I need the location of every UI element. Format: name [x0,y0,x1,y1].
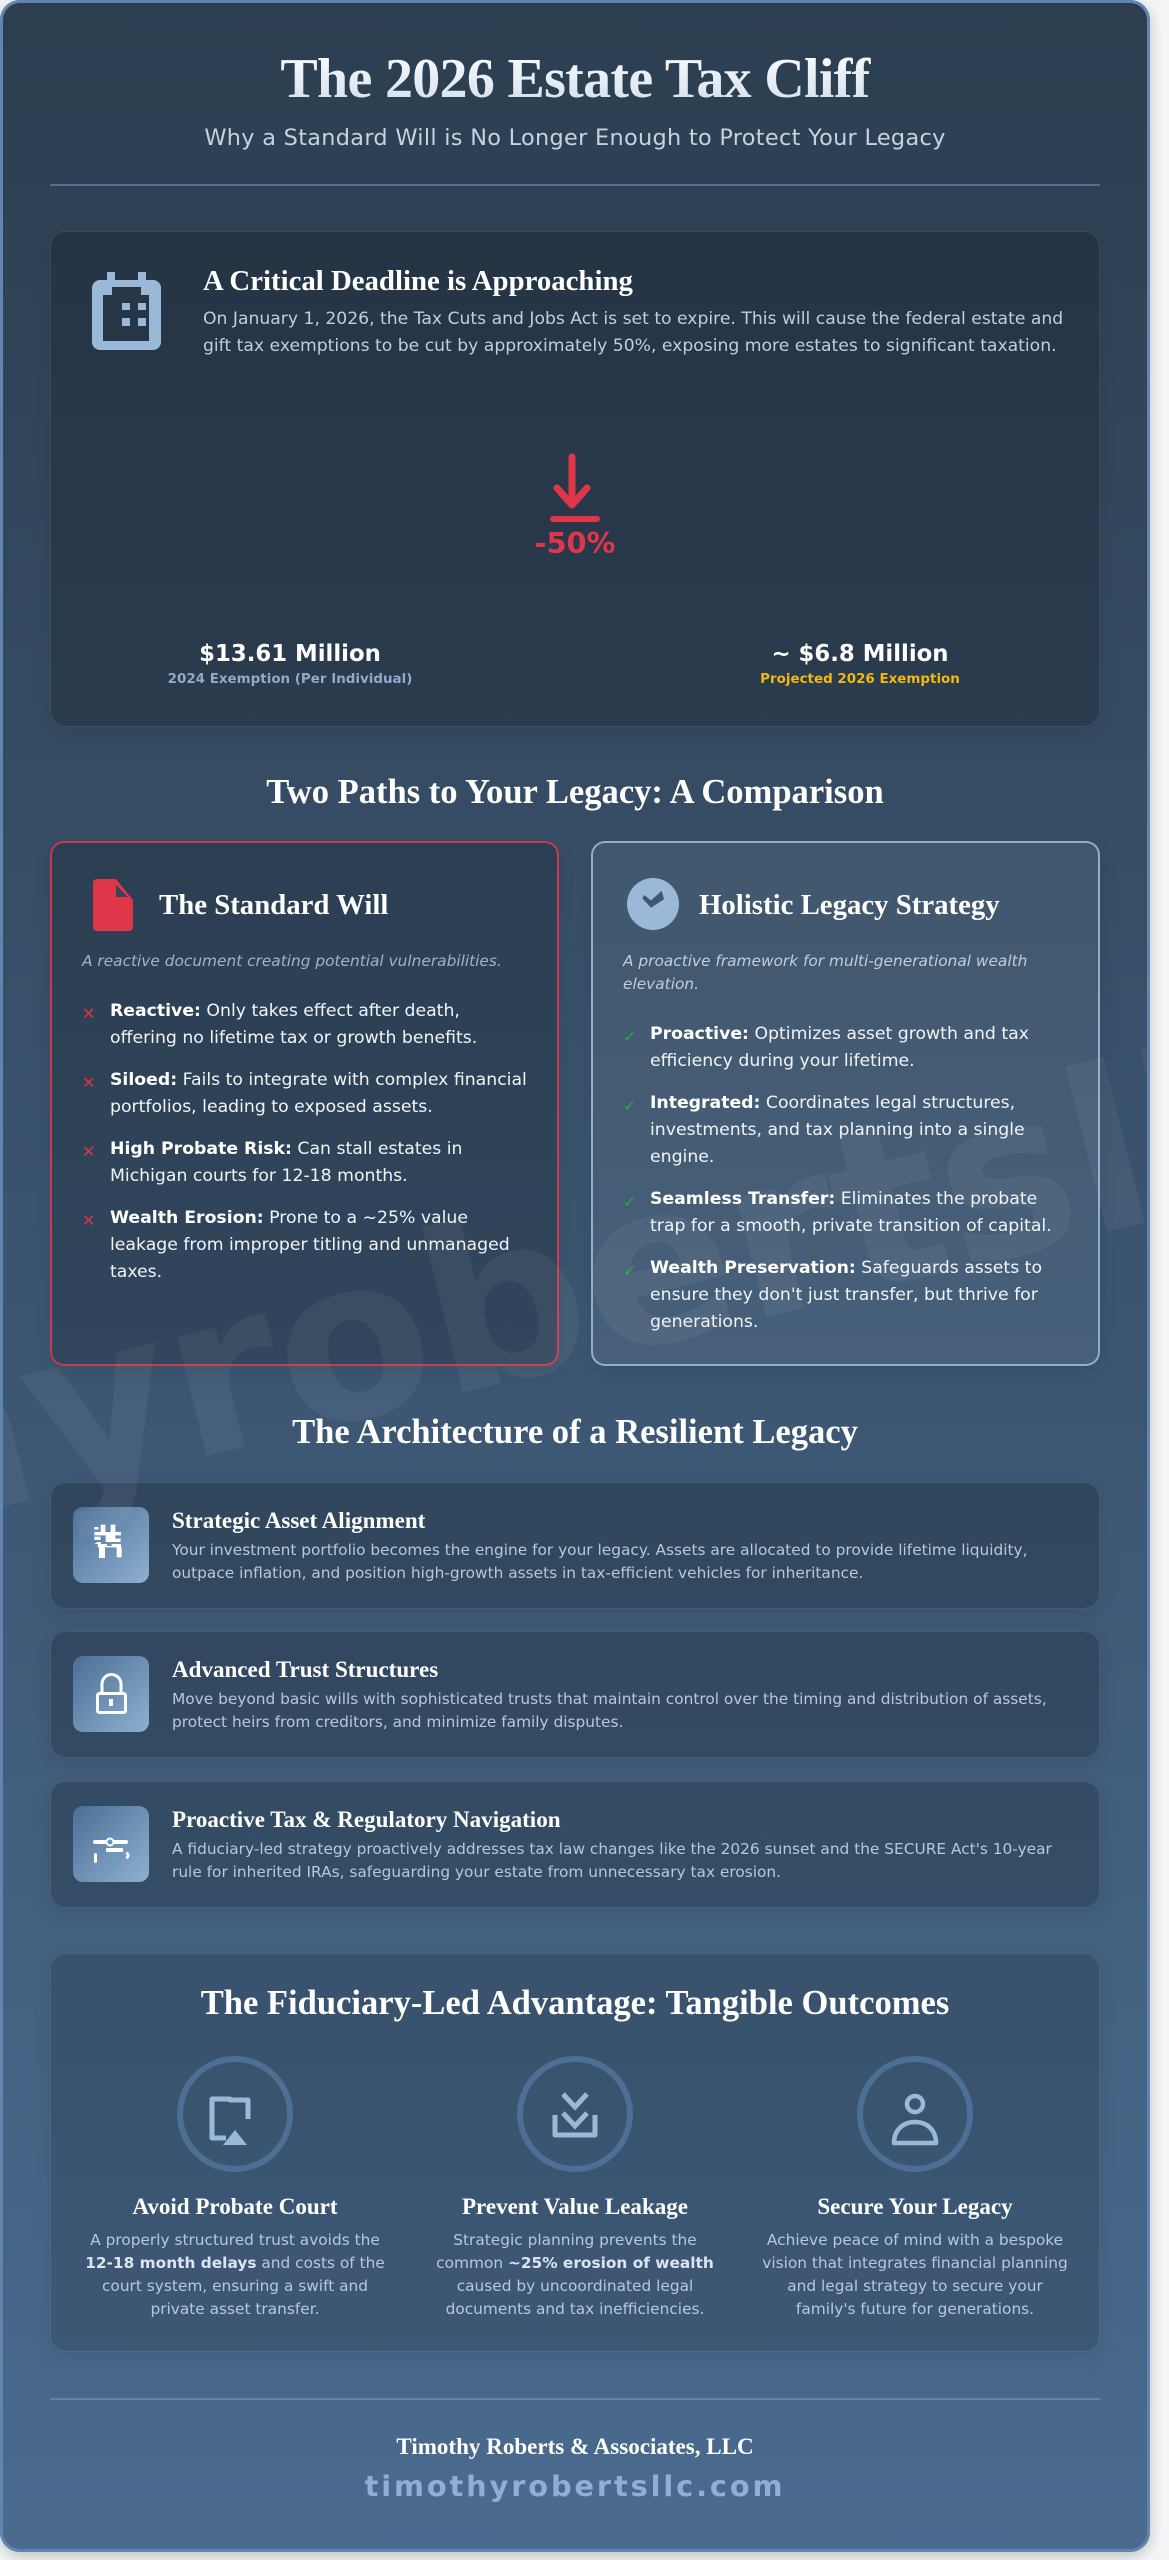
text: avoid probate: 12-18 month delays and costs of the [85,2254,385,2272]
panel: strategic asset alignment [50,1482,1100,1609]
text: deadline description [203,309,1063,356]
item: wealth erosion: taxes. [110,1262,162,1282]
item: proactive: ✓ [623,1027,636,1046]
item: integrated: engine. [650,1146,714,1166]
icon: calendar [92,272,161,350]
outcome: avoid probate court [85,2056,385,2318]
text: value leakage: common ~25% erosion of wealth [436,2254,714,2272]
icon: navigation [73,1806,149,1882]
item: siloed: portfolios, leading to exposed assets. [110,1096,433,1116]
panel: the standard will [50,841,559,1366]
item: reactive: Reactive: Only takes effect after death, [110,1000,460,1020]
heading: comparison: Two Paths to Your Legacy: A Comparison [266,773,884,811]
heading: holistic strategy: Holistic Legacy Strategy [699,889,1000,921]
heading: secure legacy: Secure Your Legacy [817,2193,1013,2219]
text: holistic summary: elevation. [623,975,699,993]
text: tax navigation: A fiduciary-led strategy proactively addresses tax law changes like the 2026 sunset and the SECURE Act's 10-year [172,1840,1052,1858]
item: siloed [82,1070,527,1116]
panel: advanced trust structures [50,1631,1100,1758]
icon: download tray in ring [517,2056,633,2172]
item: wealth preservation: ✓ [623,1261,636,1280]
item: integrated: Integrated: Coordinates legal structures, [650,1092,1015,1112]
text: secure legacy: and legal strategy to secure your [787,2277,1043,2295]
item: wealth preservation: generations. [650,1312,758,1332]
item: probate risk: High Probate Risk: Can stall estates in [110,1138,462,1158]
text: deadline description: On January 1, 2026, the Tax Cuts and Jobs Act is set to expire. This will cause the federal estate and [203,309,1063,329]
icon: document [93,879,133,931]
heading: outcomes: The Fiduciary-Led Advantage: Tangible Outcomes [201,1984,949,2022]
text: trust structures: protect heirs from creditors, and minimize family disputes. [172,1712,623,1730]
text: avoid probate: court system, ensuring a swift and [102,2277,368,2295]
item: wealth preservation [623,1258,1042,1332]
outcome: secure your legacy [762,2056,1068,2318]
stat: 2024 exemption [168,641,412,687]
heading: value leakage: Prevent Value Leakage [462,2193,688,2219]
panel: tangible outcomes [50,1953,1100,2352]
list: standard will drawbacks [82,1000,527,1282]
item: integrated [623,1092,1025,1166]
text: trust structures [172,1690,1047,1730]
text: standard will summary: A reactive document creating potential vulnerabilities. [82,952,502,970]
item: integrated: ✓ [623,1096,636,1115]
item: wealth erosion [82,1208,510,1282]
stat: minus fifty percent: -50% [535,526,615,560]
item: seamless transfer: Seamless Transfer: Eliminates the probate [650,1188,1037,1208]
title: The 2026 Estate Tax Cliff [280,48,870,110]
icon: chip [73,1507,149,1583]
icon: lock [73,1656,149,1732]
text: avoid probate: A properly structured trust avoids the [90,2231,380,2249]
icon: folder in ring [177,2056,293,2172]
heading: trust structures: Advanced Trust Structures [172,1656,438,1682]
text: asset alignment: Your investment portfolio becomes the engine for your legacy. Assets are allocated to provide lifetime liquidity, [172,1540,1028,1558]
item: wealth preservation: ensure they don't just transfer, but thrive for [650,1284,1038,1304]
item: seamless transfer: ✓ [623,1192,636,1211]
footer: website: timothyrobertsllc.com [365,2469,785,2503]
text: value leakage: Strategic planning prevents the [453,2231,697,2249]
heading: asset alignment: Strategic Asset Alignment [172,1507,425,1533]
subtitle: Why a Standard Will is No Longer Enough to Protect Your Legacy [204,125,946,151]
item: wealth erosion: ✕ [82,1211,95,1230]
item: proactive: Proactive: Optimizes asset growth and tax [650,1024,1029,1044]
text: value leakage: documents and tax inefficiencies. [446,2300,704,2318]
heading: tax navigation: Proactive Tax & Regulatory Navigation [172,1806,561,1832]
heading: standard will: The Standard Will [159,889,388,921]
title [0,46,1150,112]
value: $13.61 Million [199,641,381,667]
value: ~ $6.8 Million [771,641,949,667]
footer: company name: Timothy Roberts & Associates, LLC [396,2433,754,2459]
text: trust structures: Move beyond basic wills with sophisticated trusts that maintain control over the timing and distribution of assets, [172,1690,1047,1708]
item: siloed: ✕ [82,1073,95,1092]
text: secure legacy: Achieve peace of mind with a bespoke [767,2231,1063,2249]
item: reactive [82,1000,477,1048]
text: avoid probate [85,2231,385,2318]
outcome: prevent value leakage [436,2056,714,2318]
item: proactive [623,1024,1029,1070]
icon: down arrow [550,454,600,522]
heading: avoid probate: Avoid Probate Court [132,2193,338,2219]
text: asset alignment [172,1540,1028,1582]
text: avoid probate: private asset transfer. [150,2300,320,2318]
item: probate risk: Michigan courts for 12-18 months. [110,1166,408,1186]
label: Projected 2026 Exemption [760,672,960,687]
heading: deadline: A Critical Deadline is Approaching [203,265,633,297]
item: wealth erosion: Wealth Erosion: Prone to a ~25% value [110,1208,468,1228]
panel: proactive tax navigation [50,1781,1100,1908]
text: secure legacy: family's future for generations. [796,2300,1034,2318]
text: deadline description: gift tax exemptions to be cut by approximately 50%, exposing more estates to significant taxation. [203,336,1057,356]
panel: critical deadline [50,231,1100,727]
panel: holistic legacy strategy [591,841,1100,1366]
text: secure legacy [762,2231,1068,2318]
text: secure legacy: vision that integrates financial planning [762,2254,1068,2272]
item: proactive: efficiency during your lifetime. [650,1050,915,1070]
text: tax navigation: rule for inherited IRAs, safeguarding your estate from unnecessary tax erosion. [172,1862,781,1880]
text: asset alignment: outpace inflation, and position high-growth assets in tax-efficient vehicles for inheritance. [172,1564,863,1582]
item: reactive: offering no lifetime tax or growth benefits. [110,1028,477,1048]
list: holistic benefits [623,1024,1052,1332]
text: holistic summary: A proactive framework for multi-generational wealth [623,952,1027,970]
text: value leakage: caused by uncoordinated legal [457,2277,693,2295]
item: siloed: Siloed: Fails to integrate with complex financial [110,1070,527,1090]
item: integrated: investments, and tax planning into a single [650,1120,1025,1140]
icon: check badge [627,878,679,930]
text: tax navigation [172,1840,1052,1880]
item: wealth preservation: Wealth Preservation: Safeguards assets to [650,1258,1042,1278]
item: probate risk: ✕ [82,1142,95,1161]
item: wealth erosion: leakage from improper titling and unmanaged [110,1234,510,1254]
stat: 2026 exemption [760,641,960,687]
text: holistic summary [622,952,1027,993]
item: reactive: ✕ [82,1004,95,1023]
icon: person in ring [857,2056,973,2172]
heading: architecture: The Architecture of a Resilient Legacy [292,1413,858,1451]
label: 2024 Exemption (Per Individual) [168,672,412,687]
text: value leakage [436,2231,714,2318]
item: seamless transfer [623,1188,1052,1236]
item: probate risk [82,1138,462,1186]
item: seamless transfer: trap for a smooth, private transition of capital. [650,1216,1052,1236]
